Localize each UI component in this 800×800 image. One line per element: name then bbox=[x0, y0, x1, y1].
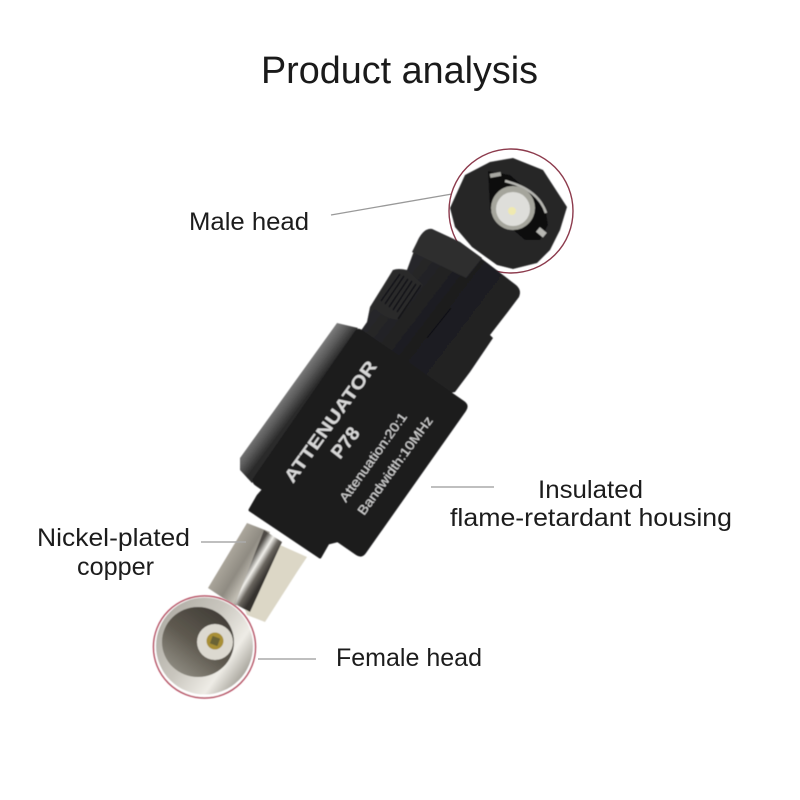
inset ring: male head bbox=[449, 149, 573, 273]
housing print: Bandwidth:10MHz bbox=[354, 413, 436, 518]
title: Product analysis bbox=[261, 50, 538, 92]
label: nickel-plated copper bbox=[37, 524, 246, 581]
label: housing bbox=[431, 476, 732, 532]
label: female head: Female head bbox=[336, 644, 482, 672]
housing print: Attenuation:20:1 bbox=[336, 410, 410, 505]
nickel-plated barrel bbox=[208, 523, 307, 622]
label: nickel-plated copper: copper bbox=[77, 553, 154, 581]
collar bbox=[250, 488, 340, 557]
housing print bbox=[280, 357, 436, 518]
inset: female head bbox=[154, 596, 256, 698]
label: male head: Male head bbox=[189, 208, 309, 236]
label: housing: flame-retardant housing bbox=[450, 504, 732, 532]
rear knurled connector bbox=[360, 229, 520, 395]
housing front bbox=[252, 329, 468, 557]
housing print: P78 bbox=[327, 424, 365, 463]
product: attenuator bbox=[208, 229, 520, 622]
label: housing: Insulated bbox=[538, 476, 643, 504]
housing side bbox=[240, 323, 358, 483]
inset: male head bbox=[450, 158, 567, 269]
label: nickel-plated copper: Nickel-plated bbox=[37, 524, 190, 552]
housing print: ATTENUATOR bbox=[280, 357, 381, 486]
label: male head bbox=[189, 194, 452, 236]
